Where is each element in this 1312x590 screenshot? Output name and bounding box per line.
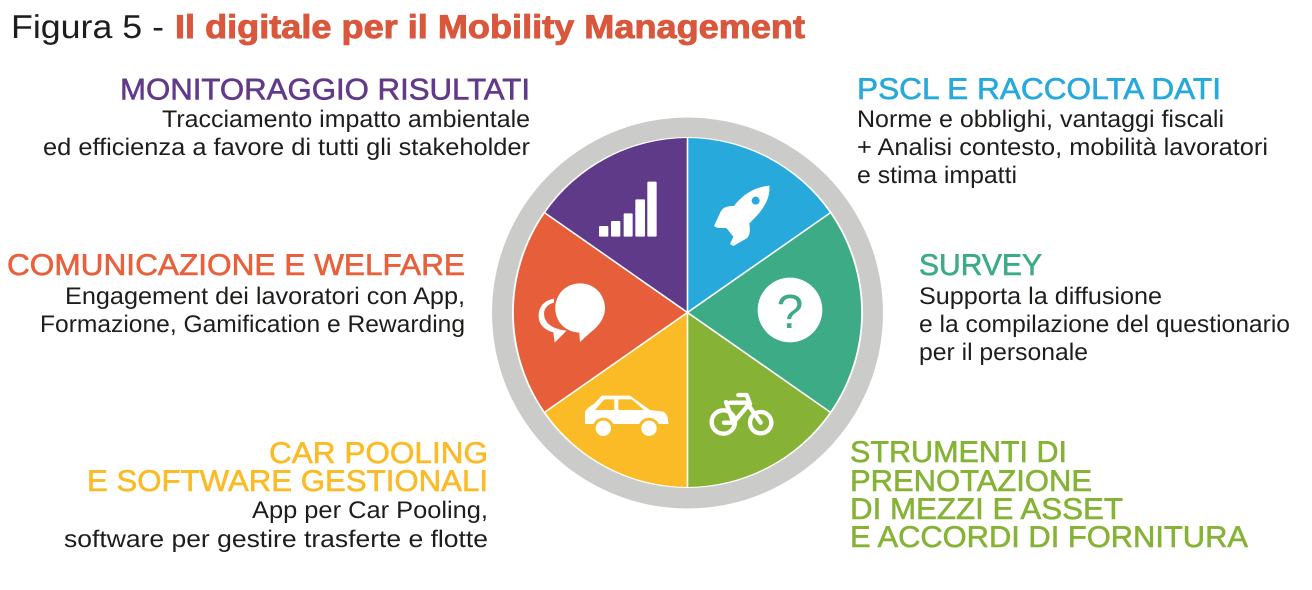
text block: car pooling description: software per gestire trasferte e flotte bbox=[64, 526, 488, 553]
heading: car pooling e software gestionali: CAR POOLING bbox=[269, 437, 488, 470]
panel: monitoraggio risultati bbox=[43, 74, 530, 161]
text block: survey description: e la compilazione del questionario bbox=[919, 311, 1290, 338]
text block: monitoraggio description: Tracciamento impatto ambientale bbox=[162, 106, 530, 133]
text block: comunicazione description bbox=[40, 283, 465, 338]
chart: wheel bbox=[492, 118, 883, 508]
text block: pscl description: + Analisi contesto, mobilità lavoratori bbox=[857, 134, 1268, 161]
icon: rocket bbox=[714, 186, 769, 246]
wedge: monitoraggio bbox=[545, 138, 688, 312]
text block: car pooling description bbox=[64, 497, 488, 553]
wedge: pscl bbox=[688, 138, 830, 312]
text block: survey description bbox=[919, 283, 1290, 366]
icon: bicycle bbox=[712, 395, 771, 434]
panel: comunicazione e welfare bbox=[7, 249, 465, 338]
heading: survey: SURVEY bbox=[919, 249, 1042, 282]
icon: question mark bbox=[758, 278, 822, 342]
outer grey ring bbox=[492, 118, 883, 508]
wedge: comunicazione bbox=[514, 213, 688, 412]
text block: monitoraggio description bbox=[43, 106, 530, 161]
text block: pscl description: Norme e obblighi, vantaggi fiscali bbox=[857, 106, 1224, 133]
icon: speech bubbles bbox=[539, 282, 606, 343]
wedge: car pooling bbox=[545, 312, 688, 487]
panel: strumenti di prenotazione bbox=[850, 436, 1248, 554]
panel: strumenti di prenotazione: STRUMENTI DI bbox=[850, 436, 1067, 469]
text block: pscl description bbox=[857, 106, 1268, 189]
icon: car bbox=[585, 396, 668, 439]
wedge: survey bbox=[688, 213, 861, 412]
panel: pscl e raccolta dati bbox=[857, 73, 1268, 189]
heading: comunicazione e welfare: COMUNICAZIONE E WELFARE bbox=[7, 249, 465, 282]
heading: pscl e raccolta dati: PSCL E RACCOLTA DATI bbox=[857, 73, 1221, 106]
panel: survey bbox=[919, 249, 1290, 366]
panel: strumenti di prenotazione: E ACCORDI DI FORNITURA bbox=[850, 521, 1248, 554]
text block: monitoraggio description: ed efficienza a favore di tutti gli stakeholder bbox=[43, 134, 530, 161]
wedge: strumenti bbox=[688, 312, 830, 487]
heading: monitoraggio risultati: MONITORAGGIO RISULTATI bbox=[120, 74, 530, 106]
text block: survey description: per il personale bbox=[919, 339, 1088, 366]
text block: comunicazione description: Engagement dei lavoratori con App, bbox=[65, 283, 465, 310]
text block: survey description: Supporta la diffusione bbox=[919, 283, 1162, 310]
panel: car pooling bbox=[64, 437, 488, 553]
text block: comunicazione description: Formazione, Gamification e Rewarding bbox=[40, 311, 465, 338]
title: Il digitale per il Mobility Management bbox=[175, 8, 805, 45]
panel: strumenti di prenotazione: DI MEZZI E ASSET bbox=[850, 493, 1123, 526]
icon: question mark: ? bbox=[777, 285, 803, 338]
heading: car pooling e software gestionali: E SOFTWARE GESTIONALI bbox=[87, 465, 488, 498]
text block: pscl description: e stima impatti bbox=[857, 162, 1017, 189]
text block: car pooling description: App per Car Pooling, bbox=[252, 497, 488, 524]
panel: strumenti di prenotazione: PRENOTAZIONE bbox=[850, 465, 1092, 498]
title: Figura 5 - bbox=[11, 8, 164, 45]
icon: bar signal bbox=[599, 182, 657, 237]
heading: car pooling e software gestionali bbox=[87, 437, 488, 498]
